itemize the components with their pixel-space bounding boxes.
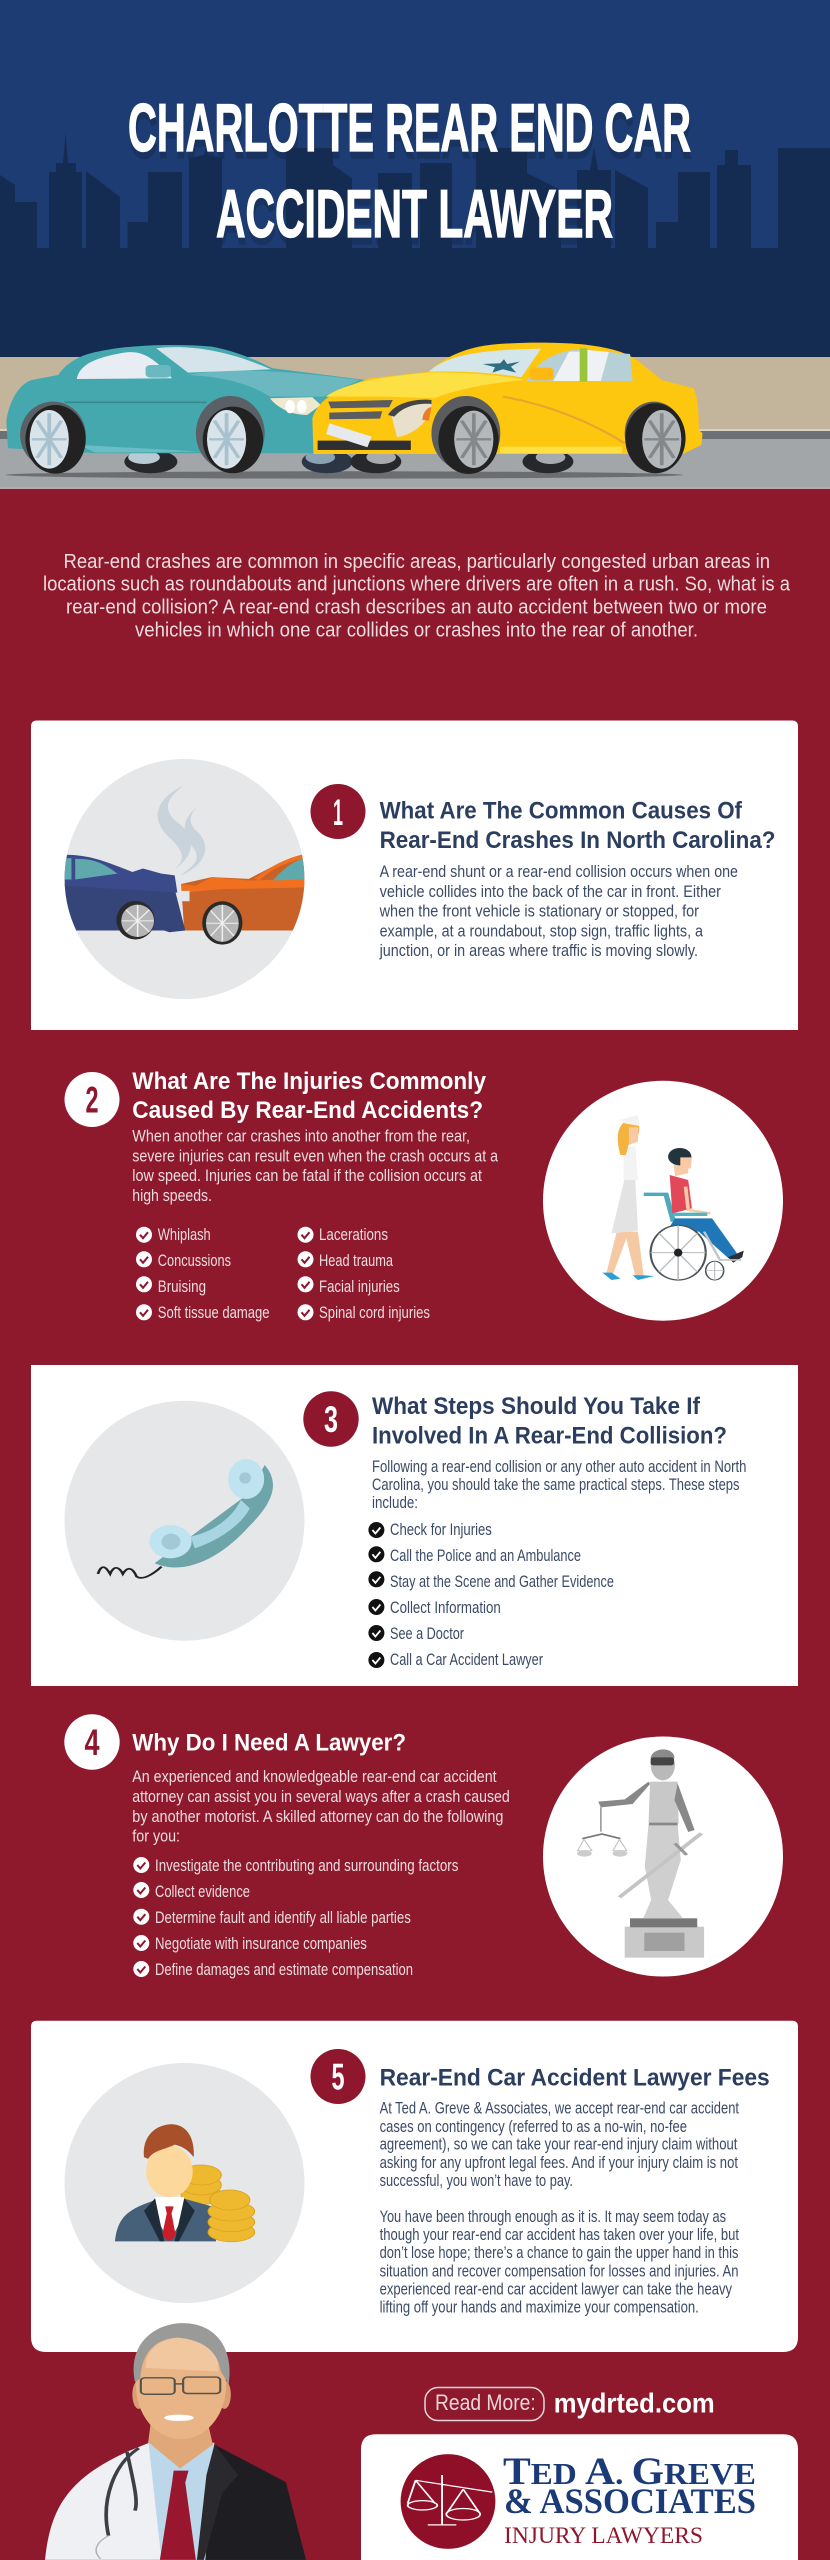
heading: Rear-End Crashes In North Carolina? xyxy=(380,827,776,854)
body text: severe injuries can result even when the crash occurs at a xyxy=(132,1147,499,1165)
badge: number 5 xyxy=(310,2049,366,2104)
body text: successful, you won’t have to pay. xyxy=(380,2172,573,2190)
body text xyxy=(132,1128,499,1205)
illustration: two cars colliding xyxy=(5,343,703,479)
panel: section 5 fees xyxy=(31,2021,798,2352)
heading: Caused By Rear-End Accidents? xyxy=(132,1097,483,1124)
body text xyxy=(372,1458,746,1512)
badge: number 4 xyxy=(64,1714,120,1770)
portrait: doctor lawyer xyxy=(45,2323,306,2560)
badge: number 4: 4 xyxy=(84,1722,100,1763)
checklist: lawyer tasks: Determine fault and identify all liable parties xyxy=(155,1909,411,1927)
checklist: injuries: Facial injuries xyxy=(319,1278,400,1296)
far wheels xyxy=(124,450,573,473)
badge: number 5: 5 xyxy=(332,2056,344,2098)
intro text: rear-end collision? A rear-end crash describes an auto accident between two or more xyxy=(66,596,767,619)
checklist: steps xyxy=(368,1521,614,1669)
checklist: injuries xyxy=(136,1226,430,1322)
icon: lawyer with coin stacks xyxy=(115,2124,255,2242)
checklist: steps: Collect Information xyxy=(390,1599,501,1617)
panel: section 3 steps xyxy=(31,1365,798,1686)
body text: asking for any upfront legal fees. And if your injury claim is not xyxy=(380,2154,738,2172)
read more link xyxy=(425,2388,715,2420)
heading: Why Do I Need A Lawyer? xyxy=(132,1730,406,1757)
body text: lifting off your hands and maximize your compensation. xyxy=(380,2298,699,2316)
heading xyxy=(372,1393,727,1450)
body text: A rear-end shunt or a rear-end collision occurs when one xyxy=(380,863,738,881)
badge: number 3: 3 xyxy=(324,1399,338,1440)
icon: lady justice statue xyxy=(543,1736,783,1976)
teal car xyxy=(6,345,365,474)
panel: section 1 common causes xyxy=(31,720,798,1030)
read more link: Read More: xyxy=(435,2390,536,2415)
heading xyxy=(132,1068,487,1124)
yellow car xyxy=(312,343,703,474)
body text: by another motorist. A skilled attorney can do the following xyxy=(132,1808,503,1826)
badge: number 1: 1 xyxy=(333,792,343,833)
firm name: INJURY LAWYERS xyxy=(504,2523,703,2548)
body text: though your rear-end car accident has taken over your life, but xyxy=(380,2226,739,2244)
heading: What Are The Common Causes Of xyxy=(380,798,743,824)
checklist: injuries: Concussions xyxy=(158,1252,231,1270)
badge: number 3 xyxy=(303,1391,359,1447)
badge: number 2: 2 xyxy=(86,1080,98,1120)
intro text xyxy=(43,550,791,642)
checklist: injuries: Spinal cord injuries xyxy=(319,1304,430,1322)
body text: At Ted A. Greve & Associates, we accept rear-end car accident xyxy=(380,2100,739,2118)
firm name: TED A. GREVE xyxy=(503,2450,756,2493)
icon: nurse pushing patient in wheelchair xyxy=(543,1081,783,1321)
badge: number 1 xyxy=(310,784,366,839)
checklist: steps: Call a Car Accident Lawyer xyxy=(390,1651,543,1669)
heading: What Are The Injuries Commonly xyxy=(132,1068,487,1095)
body text xyxy=(132,1768,510,1846)
checklist: steps: Stay at the Scene and Gather Evidence xyxy=(390,1573,614,1591)
checklist: steps: Call the Police and an Ambulance xyxy=(390,1547,581,1565)
intro text: vehicles in which one car collides or crashes into the rear of another. xyxy=(135,619,698,642)
body text: junction, or in areas where traffic is moving slowly. xyxy=(379,942,698,960)
badge: number 2 xyxy=(64,1072,120,1127)
body text: vehicle collides into the back of the car in front. Either xyxy=(380,883,721,901)
heading: Involved In A Rear-End Collision? xyxy=(372,1423,727,1450)
checklist: lawyer tasks: Negotiate with insurance companies xyxy=(155,1935,367,1953)
body text: include: xyxy=(372,1494,418,1512)
body text: low speed. Injuries can be fatal if the collision occurs at xyxy=(132,1167,482,1185)
intro text: Rear-end crashes are common in specific areas, particularly congested urban areas in xyxy=(64,550,770,573)
firm name: & ASSOCIATES xyxy=(504,2481,756,2521)
body text: When another car crashes into another from the rear, xyxy=(132,1128,470,1146)
heading xyxy=(380,798,776,854)
body text: agreement), so we can take your rear-end injury claim without xyxy=(380,2136,738,2154)
body text: for you: xyxy=(132,1828,180,1846)
body text: high speeds. xyxy=(132,1187,212,1205)
body text: experienced rear-end car accident lawyer can take the heavy xyxy=(380,2281,733,2299)
body text: cases on contingency (referred to as a no-win, no-fee xyxy=(380,2118,687,2136)
firm name xyxy=(503,2450,756,2548)
heading: What Steps Should You Take If xyxy=(372,1393,701,1420)
body text: attorney can assist you in several ways after a crash caused xyxy=(132,1788,510,1806)
body text: An experienced and knowledgeable rear-end car accident xyxy=(132,1768,497,1786)
checklist: lawyer tasks: Define damages and estimate compensation xyxy=(155,1961,413,1979)
title xyxy=(128,90,691,252)
logo card xyxy=(361,2434,798,2560)
body text xyxy=(379,863,738,960)
checklist: steps: See a Doctor xyxy=(390,1625,464,1643)
checklist: lawyer tasks xyxy=(133,1857,458,1979)
checklist: steps: Check for Injuries xyxy=(390,1521,492,1539)
header banner with skyline and road xyxy=(0,0,830,489)
icon: crashed blue and orange cars with smoke xyxy=(65,785,304,945)
body text: example, at a roundabout, stop sign, traffic lights, a xyxy=(380,922,704,940)
body text: You have been through enough as it is. It may seem today as xyxy=(380,2208,726,2226)
icon: telephone handset xyxy=(98,1459,273,1578)
checklist: injuries: Head trauma xyxy=(319,1252,394,1270)
panel: section 2 injuries xyxy=(64,1068,783,1322)
checklist: injuries: Soft tissue damage xyxy=(158,1304,270,1322)
body text: when the front vehicle is stationary or stopped, for xyxy=(379,903,699,921)
checklist: lawyer tasks: Collect evidence xyxy=(155,1883,250,1901)
icon: scales of justice xyxy=(408,2475,492,2525)
read more link: mydrted.com xyxy=(554,2388,715,2418)
body text: Following a rear-end collision or any other auto accident in North xyxy=(372,1458,746,1476)
body text: don’t lose hope; there’s a chance to gain the upper hand in this xyxy=(380,2244,738,2262)
checklist: injuries: Whiplash xyxy=(158,1226,211,1244)
checklist: lawyer tasks: Investigate the contributing and surrounding factors xyxy=(155,1857,458,1875)
panel: section 4 why a lawyer xyxy=(64,1714,783,1979)
checklist: injuries: Bruising xyxy=(158,1278,206,1296)
body text xyxy=(380,2100,739,2316)
checklist: injuries: Lacerations xyxy=(319,1226,388,1244)
body text: Carolina, you should take the same practical steps. These steps xyxy=(372,1476,740,1494)
body text: situation and recover compensation for losses and injuries. An xyxy=(380,2262,738,2280)
heading: Rear-End Car Accident Lawyer Fees xyxy=(380,2065,770,2092)
